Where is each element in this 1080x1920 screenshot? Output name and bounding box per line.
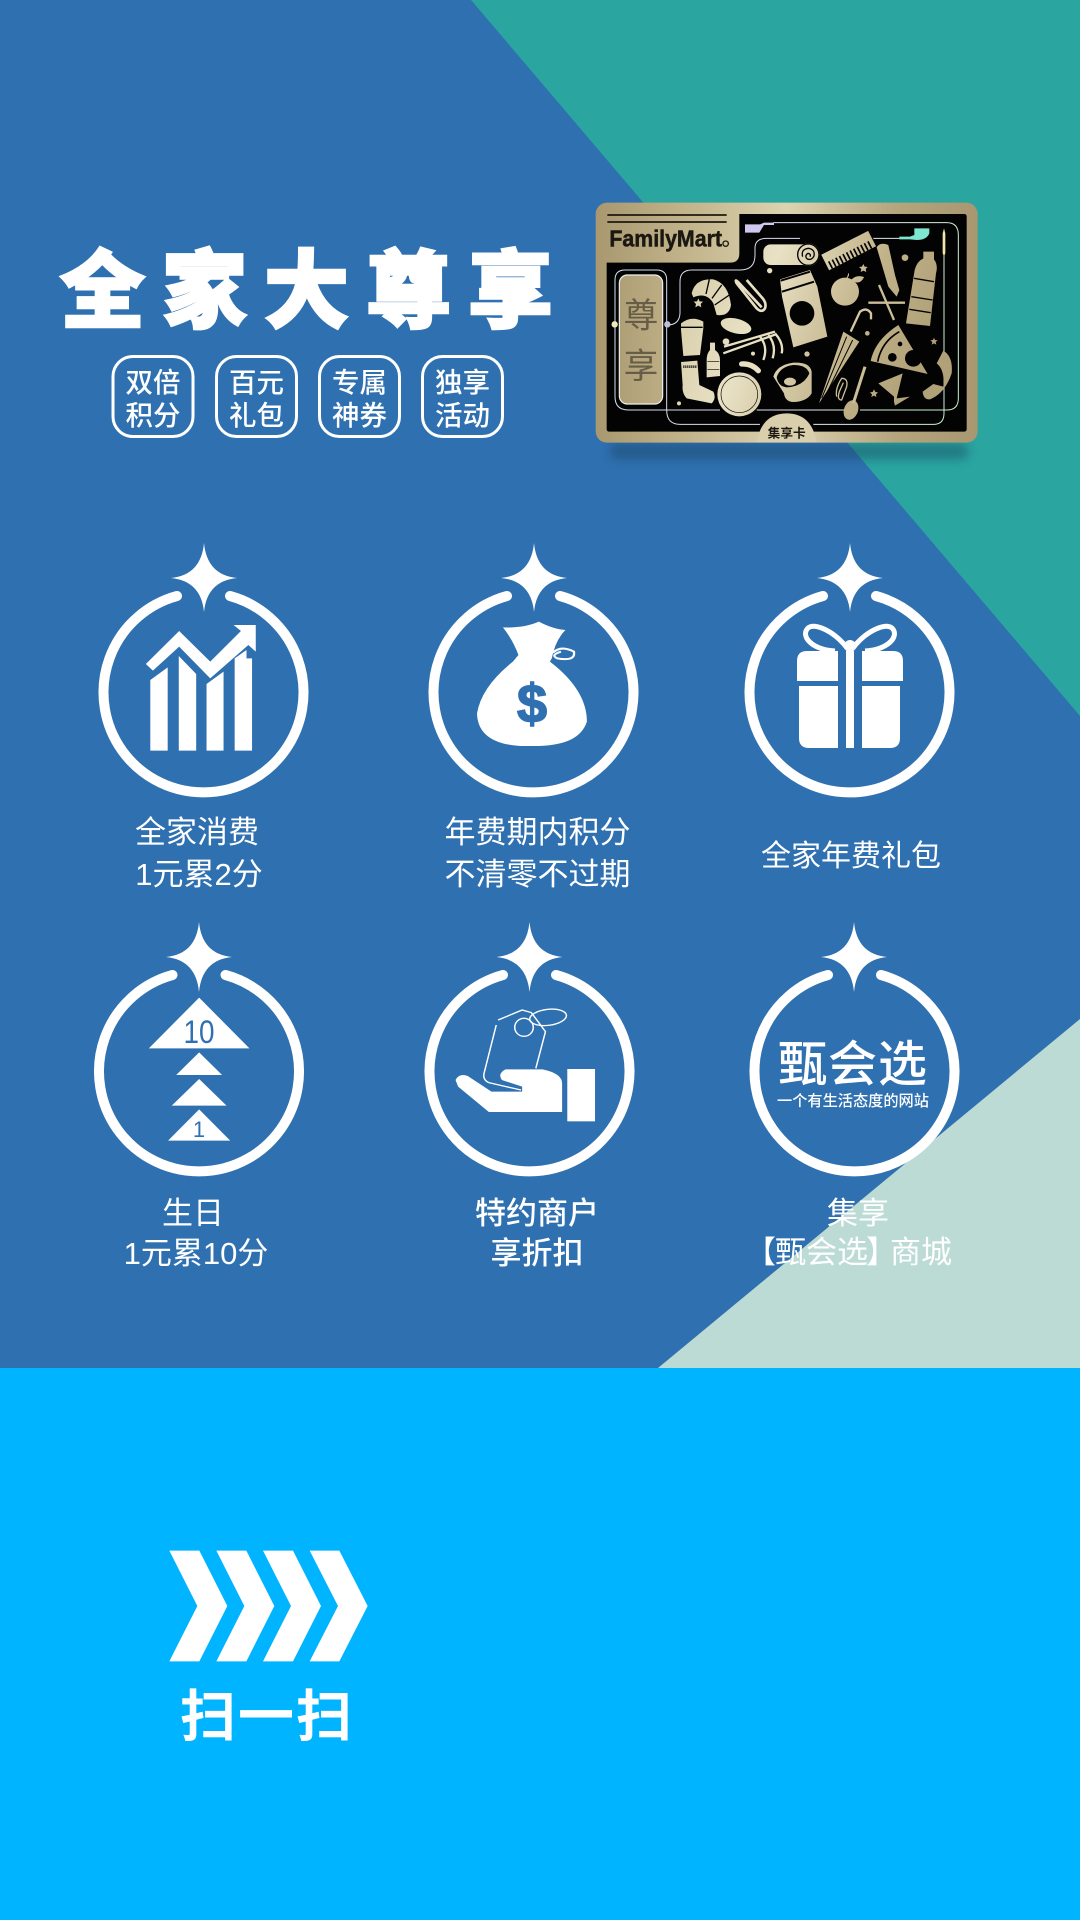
tag: activities xyxy=(422,356,502,436)
caption: 享折扣 xyxy=(490,1236,584,1271)
cocktail xyxy=(878,373,910,406)
tag: gift pack: 百元 xyxy=(229,367,284,398)
card shadow xyxy=(610,443,968,459)
right earbud xyxy=(899,228,929,240)
card black face xyxy=(607,214,967,432)
tag: double points: 积分 xyxy=(126,400,180,431)
benefit: points never expire xyxy=(434,543,634,892)
caption: 全家年费礼包 xyxy=(761,840,941,873)
membership card xyxy=(596,203,978,459)
pen xyxy=(877,244,899,297)
pizza xyxy=(871,325,928,374)
logo slogan: 一个有生活态度的网站 xyxy=(777,1092,929,1110)
card gold frame xyxy=(596,203,978,443)
tumbler xyxy=(681,319,703,356)
umbrella xyxy=(819,310,871,403)
icon: triangle stack xyxy=(149,998,249,1141)
tag: activities: 活动 xyxy=(435,400,490,431)
roll cake xyxy=(763,243,820,266)
caption xyxy=(745,1196,952,1270)
multiplier 10: 10 xyxy=(184,1014,214,1050)
tag: gift pack xyxy=(216,356,296,436)
sparkle xyxy=(501,543,567,612)
sparkle xyxy=(171,543,237,612)
small bottle xyxy=(707,343,720,377)
tag: coupons: 神券 xyxy=(332,400,387,431)
caption xyxy=(135,815,263,892)
benefit: points spending xyxy=(103,543,303,892)
pudding bowl xyxy=(773,363,812,402)
water bottle xyxy=(906,252,937,326)
small paperclip xyxy=(836,378,847,400)
tag: gift pack: 礼包 xyxy=(229,400,284,431)
logo wordmark: FamilyMart xyxy=(609,226,722,252)
caption: 特约商户 xyxy=(475,1196,599,1231)
small stars xyxy=(694,264,938,397)
tag: activities: 独享 xyxy=(435,367,490,398)
caption: 不清零不过期 xyxy=(444,857,630,892)
scan arrows xyxy=(169,1551,368,1661)
benefit: Zhenhuixuan mall xyxy=(745,922,955,1270)
icon: money bag xyxy=(477,622,587,746)
background: pale green triangle xyxy=(658,1019,1080,1368)
tag row xyxy=(113,356,502,436)
ring xyxy=(434,596,634,792)
logo wordmark: 甄会选 xyxy=(778,1038,928,1092)
logo bars xyxy=(607,215,727,222)
caption xyxy=(444,815,630,892)
benefit: partner merchant discount xyxy=(430,922,630,1271)
tag: coupons: 专属 xyxy=(332,367,387,398)
spoon xyxy=(841,367,865,422)
sparkle xyxy=(821,922,887,992)
paperclip xyxy=(736,280,765,311)
scan label: 扫一扫 xyxy=(180,1685,354,1748)
caption: 1元累10分 xyxy=(124,1236,268,1271)
ring xyxy=(103,596,303,792)
background: teal triangle xyxy=(471,0,1080,716)
side plate characters: 尊 xyxy=(624,297,658,335)
icon: rising bar chart xyxy=(146,625,256,751)
card label tab xyxy=(757,413,817,442)
sparkle xyxy=(817,543,883,612)
card label text: 集享卡 xyxy=(768,425,806,440)
sparkle xyxy=(166,922,232,992)
registered mark xyxy=(723,241,728,246)
dollar sign: $ xyxy=(517,674,547,734)
croissant xyxy=(692,279,731,315)
bread xyxy=(719,315,753,337)
small dots xyxy=(677,254,908,405)
plate xyxy=(717,372,761,416)
side plate characters xyxy=(624,297,658,386)
left earbud xyxy=(745,223,774,233)
comb xyxy=(821,231,876,270)
caption: 生日 xyxy=(162,1196,224,1231)
side plate characters: 享 xyxy=(624,348,658,386)
background: blue main xyxy=(0,0,1080,1368)
caption: 【甄会选】商城 xyxy=(745,1235,952,1270)
caption: 全家消费 xyxy=(135,815,259,850)
icon: hand with price tag xyxy=(456,1007,595,1121)
background: bright blue footer xyxy=(0,1368,1080,1920)
coffee cup xyxy=(780,270,827,347)
cutlery xyxy=(868,285,905,320)
sausage xyxy=(742,364,758,371)
caption: 年费期内积分 xyxy=(444,815,630,850)
benefit: annual gift pack xyxy=(750,543,949,873)
caption xyxy=(475,1196,599,1271)
jack plug xyxy=(943,228,945,256)
ring xyxy=(754,975,955,1171)
tag: double points: 双倍 xyxy=(126,367,180,398)
title: 全家大尊享 xyxy=(60,245,570,340)
caption xyxy=(124,1196,268,1271)
sparkle xyxy=(496,922,562,992)
caption: 1元累2分 xyxy=(135,857,263,892)
benefit: birthday points xyxy=(99,922,299,1271)
ring xyxy=(430,975,630,1171)
side plate xyxy=(619,275,663,404)
sock xyxy=(681,361,715,403)
caption: 集享 xyxy=(827,1196,889,1231)
ring xyxy=(750,596,949,792)
icon: gift box xyxy=(797,626,903,748)
doodle items xyxy=(677,231,952,422)
multiplier 1: 1 xyxy=(193,1117,205,1142)
ring xyxy=(99,975,299,1171)
tag: double points xyxy=(113,356,193,436)
telephone xyxy=(923,351,952,399)
tag: coupons xyxy=(320,356,400,436)
holographic lines xyxy=(615,223,958,424)
line dots xyxy=(611,321,670,327)
noodles xyxy=(723,332,782,360)
apple xyxy=(831,273,863,306)
